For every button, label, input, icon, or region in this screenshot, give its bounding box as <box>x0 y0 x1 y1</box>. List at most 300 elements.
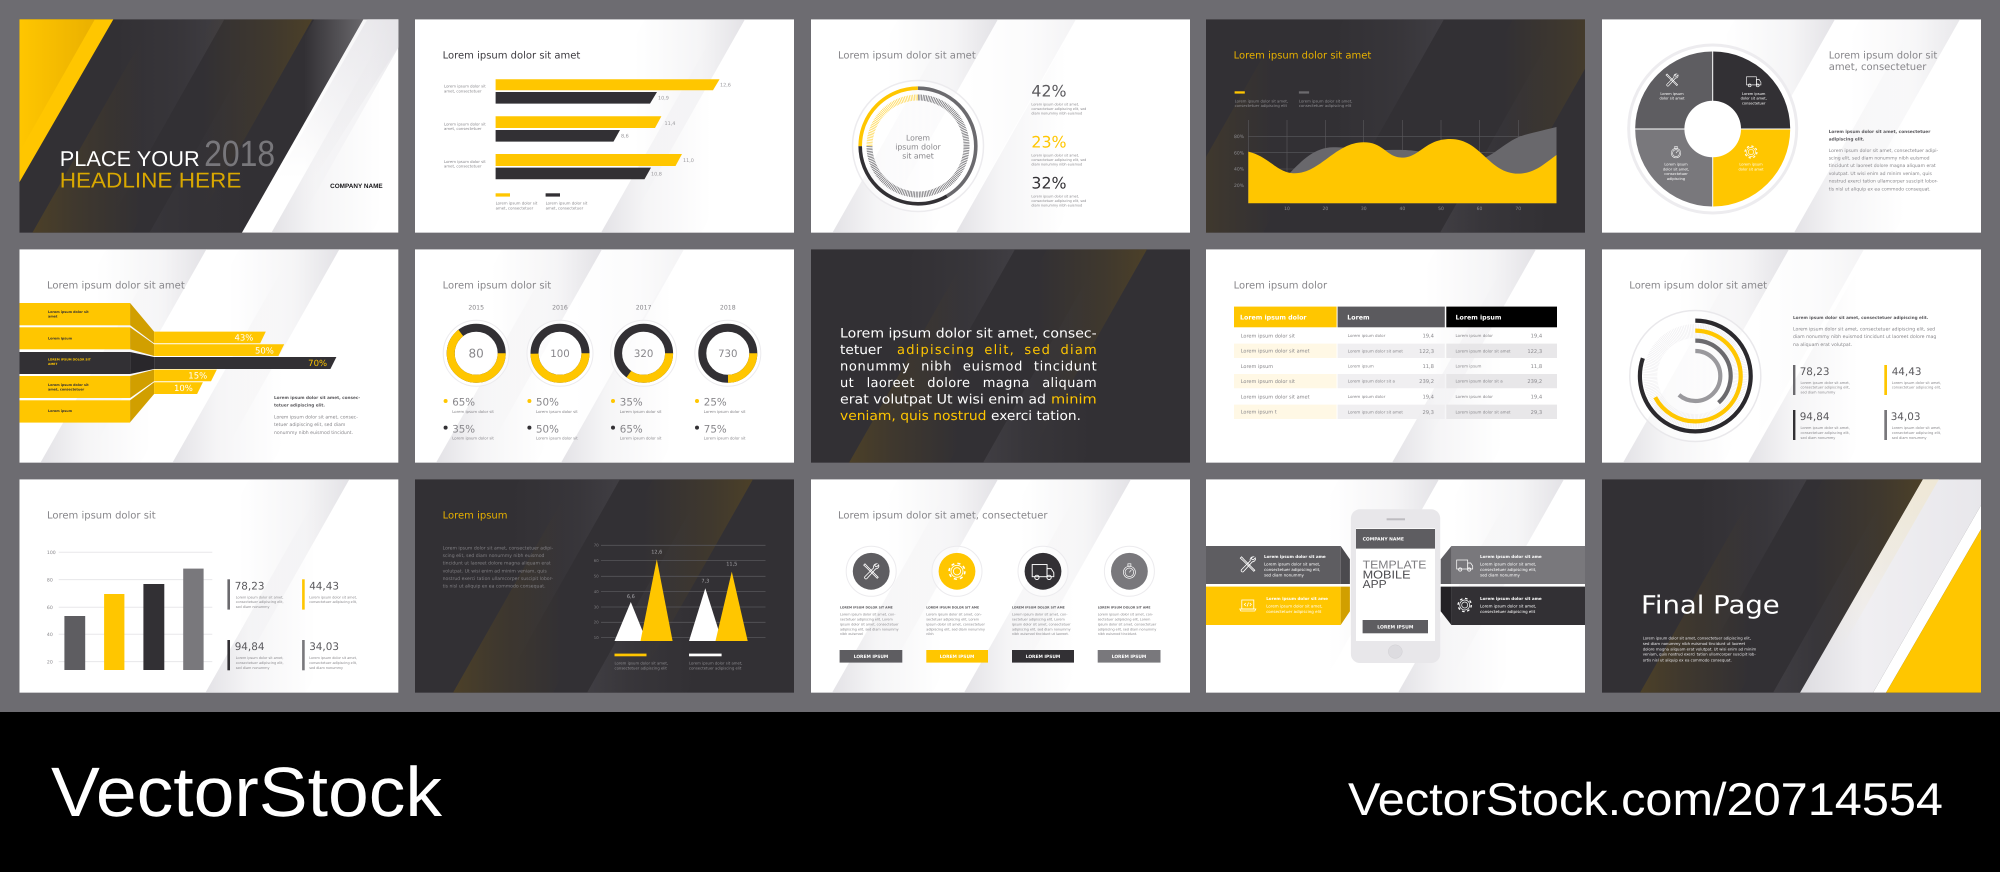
body text: tetuer adipiscing elit, sed diam <box>274 422 346 428</box>
column: truck: adipiscing elit, sed diam nonummy <box>1012 627 1071 631</box>
area chart <box>1234 120 1557 212</box>
stat 78,23: consectetuer adipiscing elit, <box>236 600 284 604</box>
phone mockup: COMPANY NAME <box>1363 537 1404 543</box>
stat 44,43 <box>302 579 357 610</box>
column: gear: nibh <box>926 632 934 636</box>
quadrant pie chart: dolor sit amet <box>1738 167 1764 171</box>
funnel blocks: 70% <box>308 359 327 369</box>
funnel blocks: amet, consectetuer <box>48 388 85 392</box>
quote text: erat volutpat Ut wisi enim ad <box>840 393 1046 408</box>
column: gear: Lorem ipsum dolor sit amet, con- <box>926 612 982 616</box>
donut 2015: Lorem ipsum dolor sit <box>452 409 494 414</box>
stat 34,03: Lorem ipsum dolor sit amet, <box>309 656 357 660</box>
stat 78,23 <box>227 579 284 610</box>
headline second line: HEADLINE HERE <box>60 169 241 193</box>
legend <box>614 654 743 670</box>
legend: amet, consectetuer <box>546 205 584 210</box>
bar labels: Lorem ipsum dolor sit <box>444 84 486 89</box>
heading: Lorem ipsum dolor sit amet <box>838 50 976 61</box>
heading: Lorem ipsum dolor sit amet, consectetuer <box>838 510 1048 521</box>
area chart: 10 <box>1284 206 1290 212</box>
quadrant pie chart: Lorem ipsum <box>1739 162 1763 166</box>
stat 94,84: consectetuer adipiscing elit, <box>236 661 284 665</box>
left panel: yellow feature: Lorem ipsum dolor sit amet, <box>1266 603 1323 608</box>
bold lead text: tetuer adipiscing elit. <box>274 402 325 408</box>
legend <box>1235 91 1352 108</box>
body text: volutpat. Ut wisi enim ad minim veniam, quis <box>443 568 547 574</box>
column chart <box>47 550 212 670</box>
legend: Lorem ipsum dolor sit <box>496 201 538 206</box>
stat 42%: 42% <box>1031 82 1067 101</box>
triangle chart: 70 <box>594 543 599 548</box>
phone mockup: LOREM IPSUM <box>1377 624 1414 630</box>
legend: Lorem ipsum dolor sit amet, <box>689 661 743 666</box>
body text: scing elit, sed diam nonummy nibh euismod <box>443 553 545 559</box>
triangle chart <box>594 543 766 641</box>
quote text: adipiscing elit, sed diam <box>897 343 1097 358</box>
quote text: Lorem ipsum dolor sit amet, consec- <box>840 326 1097 341</box>
panel: slide 15 final page <box>1586 479 1994 693</box>
stat 32%: Lorem ipsum dolor sit amet, <box>1031 194 1079 198</box>
stat 94,84: Lorem ipsum dolor sit amet, <box>1800 426 1850 430</box>
stat 94,84: 94,84 <box>235 641 265 653</box>
panel: slide 1 cover <box>19 19 398 233</box>
table: Lorem ipsum dolor sit a <box>1348 379 1396 384</box>
funnel blocks: 43% <box>234 334 253 344</box>
donut 2015: 2015 <box>468 305 484 312</box>
triangle chart: 40 <box>594 589 599 594</box>
donut 2015: Lorem ipsum dolor sit <box>452 436 494 441</box>
legend <box>496 193 588 210</box>
yellow corner <box>19 19 113 182</box>
triangle chart: 30 <box>594 604 599 609</box>
quote text <box>840 326 1097 424</box>
stat 42%: consectetuer adipiscing elit, sed <box>1031 107 1086 111</box>
title: Final Page <box>1641 590 1780 619</box>
stat 78,23: sed diam nonummy <box>236 605 269 609</box>
footer url: VectorStock.com/20714554 <box>1348 773 1943 825</box>
radial arc chart <box>1630 310 1761 442</box>
column: stopwatch: ipsum dolor sit amet, consectetuer <box>1098 622 1157 626</box>
body text: Lorem ipsum dolor sit amet, consectetuer adipi- <box>1829 148 1938 154</box>
triangle chart: 7,3 <box>701 579 709 585</box>
column chart: 60 <box>47 605 53 611</box>
donut 2018: 730 <box>718 349 738 360</box>
column: tools: adipiscing elit, sed diam nonummy <box>840 627 899 631</box>
left panel: yellow feature: Lorem ipsum dolor sit ame <box>1266 596 1328 601</box>
bar labels: Lorem ipsum dolor sit <box>444 159 486 164</box>
right panel: grey feature: consectetuer adipiscing elit, <box>1480 567 1536 572</box>
triangle chart: 11,5 <box>726 561 737 567</box>
panel: slide 11 column chart <box>19 479 426 693</box>
triangle chart: 50 <box>594 574 599 579</box>
stat 78,23: Lorem ipsum dolor sit amet, <box>1800 381 1850 385</box>
heading: Lorem ipsum dolor sit <box>443 280 551 291</box>
area chart: 20 <box>1323 206 1328 212</box>
column: truck: ipsum dolor sit amet, consectetuer <box>1012 622 1071 626</box>
heading: amet, consectetuer <box>1829 62 1927 73</box>
body text: Lorem ipsum dolor sit amet, consectetuer adipi- <box>443 545 554 551</box>
area chart: 50 <box>1438 206 1444 212</box>
table: Lorem ipsum dolor sit <box>1241 333 1295 339</box>
table: 29,3 <box>1531 410 1542 416</box>
panel: slide 8 quote text <box>794 249 1204 463</box>
donut 2018: 2018 <box>720 305 736 312</box>
donut 2015: 80 <box>469 347 484 361</box>
legend: Lorem ipsum dolor sit amet, <box>1299 98 1352 103</box>
column: tools: LOREM IPSUM <box>854 654 888 660</box>
stat 94,84 <box>1793 410 1850 440</box>
stat 44,43: Lorem ipsum dolor sit amet, <box>1892 381 1941 385</box>
column chart: 80 <box>47 577 53 583</box>
body text: tis nisl ut aliquip ex ea commodo consequat. <box>1829 187 1931 193</box>
bar chart: 12,6 <box>720 82 731 88</box>
panel: slide 6 funnel <box>0 249 398 463</box>
column: truck: nibh euismod tincidunt ut laoreet. <box>1012 632 1069 636</box>
heading: Lorem ipsum dolor sit amet <box>443 50 580 61</box>
right panel: grey feature: sed diam nonummy <box>1480 573 1520 578</box>
stat 34,03 <box>302 640 357 670</box>
body text: Lorem ipsum dolor sit amet, consectetuer adipiscing elit, <box>1643 636 1751 641</box>
quote text: veniam, quis nostrud <box>840 409 986 424</box>
table: 239,2 <box>1419 379 1434 385</box>
table: Lorem ipsum dolor sit a <box>1456 379 1503 384</box>
donut 2016: 50% <box>536 397 559 409</box>
phone mockup <box>1351 509 1440 663</box>
stat 23%: consectetuer adipiscing elit, sed <box>1031 158 1086 162</box>
stat 94,84: consectetuer adipiscing elit, <box>1800 431 1850 435</box>
donut 2017: Lorem ipsum dolor sit <box>620 409 662 414</box>
column: truck: LOREM IPSUM <box>1026 654 1060 660</box>
table: Lorem ipsum t <box>1241 410 1277 416</box>
heading: Lorem ipsum dolor sit <box>47 510 156 521</box>
panel: slide 3 ring chart <box>777 19 1190 233</box>
stat 78,23 <box>1793 365 1850 395</box>
funnel blocks: 10% <box>174 384 193 394</box>
panel: slide 13 icon columns <box>777 479 1190 693</box>
triangle chart: 6,6 <box>627 594 635 600</box>
column: stopwatch: adipiscing elit, sed diam nonummy <box>1098 627 1156 631</box>
body text: tincidunt ut laoreet dolore magna aliquam erat <box>1829 163 1936 169</box>
table: Lorem ipsum dolor sit <box>1241 379 1295 385</box>
table: Lorem ipsum <box>1241 364 1273 370</box>
column: tools: LOREM IPSUM DOLOR SIT AME <box>840 606 893 610</box>
column: stopwatch: nibh euismod tincidunt. <box>1098 632 1137 636</box>
table: 122,3 <box>1527 349 1542 355</box>
body text: ortis nisl ut aliquip ex ea commodo consequat. <box>1643 657 1732 662</box>
stat 94,84: sed diam nonummy <box>1800 436 1835 440</box>
table: Lorem ipsum dolor sit amet <box>1348 409 1403 414</box>
column: truck: LOREM IPSUM DOLOR SIT AME <box>1012 606 1065 610</box>
table: 239,2 <box>1527 379 1542 385</box>
stat 94,84 <box>227 640 284 670</box>
quadrant pie chart: consectetuer <box>1664 172 1688 176</box>
stat 44,43: consectetuer adipiscing elit, <box>1892 386 1941 390</box>
donut 2017: 320 <box>634 349 653 360</box>
footer logo: VectorStock <box>51 753 443 831</box>
bar labels: Lorem ipsum dolor sit <box>444 121 486 126</box>
stat 44,43 <box>1884 365 1941 395</box>
body text: nostrud exerci tation ullamcorper suscipit lobor- <box>443 576 553 582</box>
table: Lorem ipsum <box>1348 364 1374 369</box>
stat 23% <box>1031 133 1086 166</box>
phone mockup: TEMPLATE <box>1363 560 1427 572</box>
quadrant pie chart: dolor sit amet, <box>1741 97 1767 101</box>
stat 34,03: sed diam nonummy <box>1892 436 1927 440</box>
column: gear <box>926 546 988 663</box>
table: 11,8 <box>1422 364 1434 370</box>
donut 2018: Lorem ipsum dolor sit <box>704 436 746 441</box>
donut 2016: 50% <box>536 424 559 436</box>
bar labels: amet, consectetuer <box>444 164 482 169</box>
table: Lorem ipsum dolor sit amet <box>1456 409 1511 414</box>
table: Lorem ipsum dolor <box>1240 315 1307 322</box>
column chart: 40 <box>47 632 53 638</box>
column: stopwatch: sectetuer adipiscing elit, Lorem <box>1098 617 1150 621</box>
quadrant pie chart: dolor sit amet, <box>1663 167 1689 171</box>
table: 19,4 <box>1531 333 1543 339</box>
legend: Lorem ipsum dolor sit <box>546 201 588 206</box>
column: tools: nibh euismod <box>840 632 863 636</box>
heading: Lorem ipsum dolor sit amet <box>1629 280 1767 291</box>
area chart: 60% <box>1234 150 1245 156</box>
stat 32%: diam nonummy nibh euismod <box>1031 204 1082 208</box>
body text: Lorem ipsum dolor sit amet, consectetuer adipiscing elit, sed <box>1793 327 1935 333</box>
donut 2018 <box>695 305 761 441</box>
body text: tincidunt ut laoreet dolore magna aliquam erat <box>443 561 551 567</box>
column: stopwatch <box>1098 546 1160 663</box>
funnel blocks: AMET <box>48 362 58 366</box>
phone mockup: MOBILE <box>1363 569 1411 581</box>
table: Lorem ipsum <box>1456 364 1482 369</box>
donut 2017: 2017 <box>636 305 652 312</box>
stat 78,23: 78,23 <box>1800 366 1829 378</box>
table: Lorem ipsum dolor sit amet <box>1241 394 1310 400</box>
donut 2016 <box>527 305 593 441</box>
bar labels: amet, consectetuer <box>444 126 482 131</box>
funnel blocks: Lorem ipsum dolor sit <box>48 383 89 387</box>
area chart: 20% <box>1234 183 1245 189</box>
donut 2018: 25% <box>704 397 727 409</box>
legend: consectetuer adipiscing elit <box>1235 103 1287 108</box>
panel: slide 9 table <box>1206 249 1613 463</box>
yellow corner <box>1886 529 1981 693</box>
stat 78,23: 78,23 <box>235 580 264 592</box>
column: tools <box>840 546 902 663</box>
stat 44,43: Lorem ipsum dolor sit amet, <box>309 595 357 599</box>
column: tools: Lorem ipsum dolor sit amet, con- <box>840 612 896 616</box>
stat 78,23: consectetuer adipiscing elit, <box>1800 386 1850 390</box>
headline: PLACE YOUR <box>60 147 200 171</box>
triangle chart: 10 <box>594 635 599 640</box>
table: Lorem ipsum dolor <box>1348 333 1386 338</box>
heading: Lorem ipsum dolor sit amet <box>1234 50 1371 61</box>
quote text: exerci tation. <box>991 409 1081 424</box>
column: truck: sectetuer adipiscing elit, Lorem <box>1012 617 1065 621</box>
bar chart: 11,4 <box>664 121 675 127</box>
column: gear: ipsum dolor sit amet, consectetuer <box>926 622 985 626</box>
donut 2017: 65% <box>620 424 643 436</box>
table: Lorem <box>1347 315 1370 322</box>
table: 19,4 <box>1531 394 1543 400</box>
area chart: 70 <box>1515 206 1521 212</box>
funnel blocks: amet <box>48 314 58 318</box>
column: gear: adipiscing elit, sed diam nonummy <box>926 627 985 631</box>
body text: tis nisl ut aliquip ex ea commodo consequat. <box>443 584 546 590</box>
donut 2015: 35% <box>452 424 475 436</box>
ring chart: sit amet <box>902 151 934 160</box>
triangle chart: 20 <box>594 620 599 625</box>
funnel blocks: Lorem ipsum <box>48 409 73 413</box>
donut 2017: Lorem ipsum dolor sit <box>620 436 662 441</box>
area chart: 80% <box>1234 134 1245 140</box>
left panel: grey feature: Lorem ipsum dolor sit ame <box>1264 554 1326 559</box>
ring chart <box>852 80 984 212</box>
donut 2018: 75% <box>704 424 727 436</box>
area chart: 30 <box>1361 206 1367 212</box>
table: Lorem ipsum <box>1456 315 1502 322</box>
donut 2016: 2016 <box>552 305 568 312</box>
stat 34,03: consectetuer adipiscing elit, <box>309 661 357 665</box>
donut 2017 <box>611 305 677 441</box>
stat 34,03: 34,03 <box>1891 411 1920 423</box>
body text: dolore magna aliquam erat volutpat. Ut wisi enim ad minim <box>1643 646 1757 651</box>
donut 2017: 35% <box>620 397 643 409</box>
right panel: grey feature <box>1441 546 1585 584</box>
bold lead text: Lorem ipsum dolor sit amet, consectetuer <box>1829 129 1931 135</box>
left panel: grey feature: Lorem ipsum dolor sit amet, <box>1264 562 1320 567</box>
right panel: dark feature: consectetuer adipiscing elit <box>1480 609 1536 614</box>
column: truck <box>1012 546 1074 663</box>
column chart: 20 <box>47 659 53 665</box>
donut 2015: 65% <box>452 397 475 409</box>
footer band <box>0 712 2000 872</box>
white diagonal strip <box>1873 505 1981 693</box>
stat 34,03 <box>1884 410 1941 440</box>
quadrant pie chart: Lorem ipsum <box>1742 92 1766 96</box>
donut 2016: Lorem ipsum dolor sit <box>536 409 578 414</box>
quadrant pie chart: Lorem ipsum <box>1664 162 1688 166</box>
heading: Lorem ipsum dolor sit amet <box>47 280 185 291</box>
bar chart: 11,0 <box>683 158 694 164</box>
panel: slide 7 donuts <box>381 249 794 463</box>
ring chart: Lorem <box>906 133 930 142</box>
heading: Lorem ipsum dolor <box>1234 280 1328 291</box>
quadrant pie chart: Lorem ipsum <box>1660 92 1684 96</box>
right panel: dark feature <box>1441 587 1585 625</box>
ring chart: ipsum dolor <box>895 142 942 151</box>
table: Lorem ipsum dolor <box>1456 333 1493 338</box>
stat 94,84: 94,84 <box>1800 411 1830 423</box>
stat 23%: 23% <box>1031 133 1067 152</box>
quote text: nonummy nibh euismod tincidunt <box>840 360 1097 375</box>
bar chart: 10,8 <box>651 171 662 177</box>
quote text: ut laoreet dolore magna aliquam <box>840 376 1097 391</box>
stat 34,03: Lorem ipsum dolor sit amet, <box>1892 426 1941 430</box>
funnel blocks: 50% <box>255 346 274 356</box>
bold lead text: adipiscing elit. <box>1829 136 1865 142</box>
legend: consectetuer adipiscing elit <box>689 665 742 670</box>
stat 78,23: Lorem ipsum dolor sit amet, <box>236 595 283 599</box>
stat 42%: diam nonummy nibh euismod <box>1031 112 1082 116</box>
right panel: dark feature: Lorem ipsum dolor sit ame <box>1480 596 1542 601</box>
column chart: 100 <box>47 550 56 556</box>
table: 19,4 <box>1422 333 1435 339</box>
panel: slide 12 triangle chart <box>399 479 808 693</box>
funnel blocks: Lorem ipsum <box>48 336 73 340</box>
column: stopwatch: Lorem ipsum dolor sit amet, con- <box>1098 612 1154 616</box>
stat 44,43: consectetuer adipiscing elit, <box>309 600 357 604</box>
panel: slide 4 area chart <box>1206 19 1585 233</box>
stat 32%: consectetuer adipiscing elit, sed <box>1031 199 1086 203</box>
stat 34,03: sed diam nonummy <box>309 666 343 670</box>
column: tools: ipsum dolor sit amet, consectetuer <box>840 622 899 626</box>
right panel: grey feature: Lorem ipsum dolor sit amet, <box>1480 562 1536 567</box>
donut 2016: Lorem ipsum dolor sit <box>536 436 578 441</box>
quote text: tetuer <box>840 343 883 358</box>
panel: slide 14 mobile app <box>1206 479 1619 693</box>
legend: Lorem ipsum dolor sit amet, <box>1235 98 1288 103</box>
legend: Lorem ipsum dolor sit amet, <box>614 661 668 666</box>
table: Lorem ipsum dolor sit amet <box>1241 349 1310 355</box>
legend: amet, consectetuer <box>496 205 534 210</box>
bar chart <box>496 79 731 179</box>
stat 32%: 32% <box>1031 174 1067 193</box>
stat 34,03: consectetuer adipiscing elit, <box>1892 431 1941 435</box>
heading: Lorem ipsum dolor sit <box>1829 50 1937 61</box>
stat 42%: Lorem ipsum dolor sit amet, <box>1031 102 1079 106</box>
funnel blocks: 15% <box>188 372 207 382</box>
left panel: yellow feature: consectetuer adipiscing elit <box>1266 609 1322 614</box>
body text: veniam, quis nostrud exerci tation ullamcorper suscipit lob- <box>1643 652 1756 657</box>
bold lead text: Lorem ipsum dolor sit amet, consec- <box>274 395 360 400</box>
stat 23%: diam nonummy nibh euismod <box>1031 162 1082 166</box>
quadrant pie chart: adipiscing <box>1667 177 1685 181</box>
left panel: grey feature: consectetuer adipiscing elit, <box>1264 567 1320 572</box>
stat 94,84: Lorem ipsum dolor sit amet, <box>236 656 283 660</box>
column: tools: sectetuer adipiscing elit, Lorem <box>840 617 893 621</box>
table: 29,3 <box>1422 410 1434 416</box>
left panel: grey feature <box>1206 546 1350 584</box>
white corner with grey streak <box>242 19 398 233</box>
stat 42% <box>1031 82 1086 116</box>
heading: Lorem ipsum <box>443 510 508 521</box>
right panel: grey feature: Lorem ipsum dolor sit ame <box>1480 554 1542 559</box>
quadrant pie chart: dolor sit amet <box>1659 97 1685 101</box>
bar chart: 8,6 <box>621 133 629 139</box>
stat 23%: Lorem ipsum dolor sit amet, <box>1031 153 1079 157</box>
table: 122,3 <box>1419 349 1434 355</box>
triangle chart: 60 <box>594 558 599 563</box>
column: gear: LOREM IPSUM <box>940 654 974 660</box>
quadrant pie chart: consectetuer <box>1742 102 1766 106</box>
legend: consectetuer adipiscing elit <box>1299 103 1352 108</box>
right panel: dark feature: Lorem ipsum dolor sit amet, <box>1480 603 1536 608</box>
body text: nonummy nibh euismod tincidunt. <box>274 430 353 436</box>
quote text: minim <box>1051 393 1097 408</box>
panel: slide 2 horizontal bars <box>415 19 822 233</box>
donut 2015 <box>443 305 509 441</box>
donut 2016: 100 <box>550 349 570 360</box>
table <box>1234 307 1557 419</box>
bold lead text: Lorem ipsum dolor sit amet, consectetuer adipiscing elit. <box>1793 315 1929 320</box>
body text: diam nonummy nibh euismod tincidunt ut laoreet dolore mag <box>1793 334 1936 340</box>
table: 11,8 <box>1531 364 1542 370</box>
table: 19,4 <box>1422 394 1435 400</box>
stat 94,84: sed diam nonummy <box>236 666 269 670</box>
panel: slide 10 radial arcs <box>1568 249 1981 463</box>
panel: slide 5 quadrant pie <box>1602 19 2000 233</box>
